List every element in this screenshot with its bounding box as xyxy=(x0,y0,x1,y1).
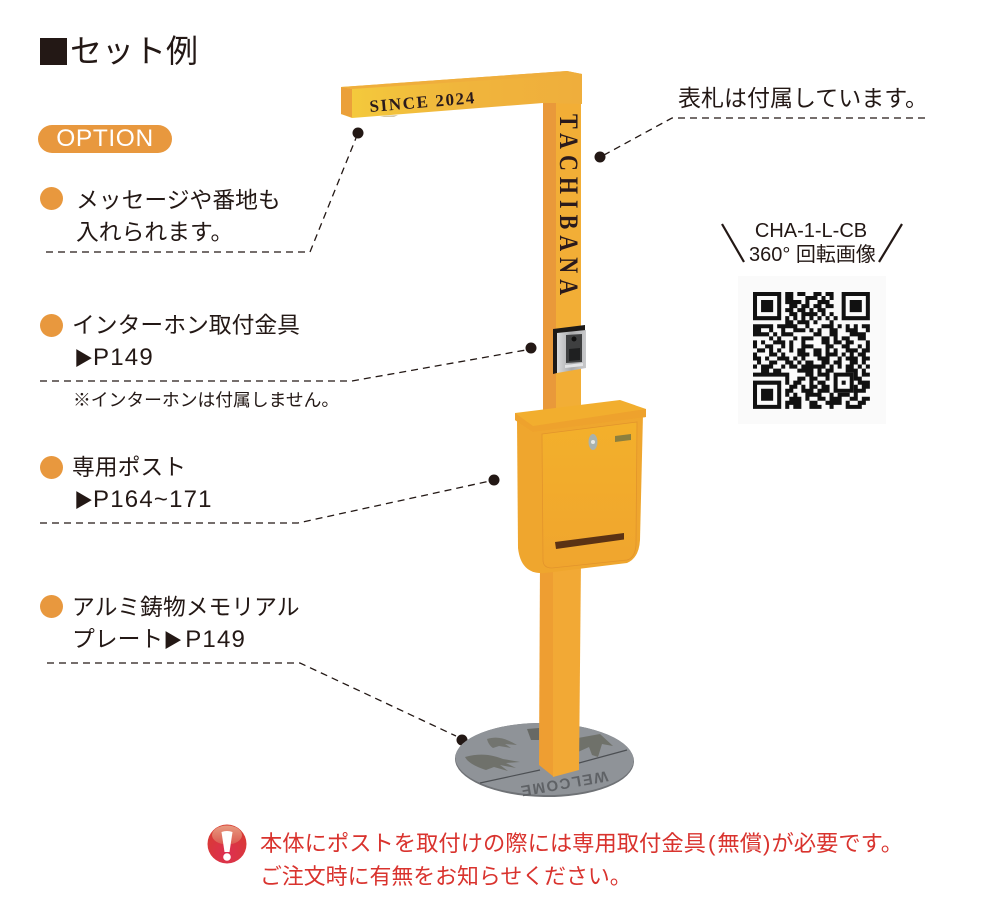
title text: セット例 xyxy=(70,33,198,69)
bullet xyxy=(40,456,63,479)
bullet xyxy=(40,595,63,618)
name plate xyxy=(615,434,631,442)
text: メッセージや番地も xyxy=(76,187,281,213)
warning text xyxy=(260,831,903,889)
bullet xyxy=(40,314,63,337)
base plate: WELCOME xyxy=(520,767,609,799)
sign text: SINCE 2024 xyxy=(369,88,475,116)
text xyxy=(72,454,213,513)
title square xyxy=(40,38,67,65)
text: インターホン取付金具 xyxy=(72,312,300,338)
text: ▶P164~171 xyxy=(74,486,213,513)
base plate xyxy=(454,721,635,799)
nameplate note: 表札は付属しています。 xyxy=(678,85,928,111)
option: memorial plate xyxy=(40,594,300,653)
option: message xyxy=(40,187,281,244)
warning text: ご注文時に有無をお知らせください。 xyxy=(260,864,632,889)
QR code background noise xyxy=(738,276,886,424)
QR caption: CHA-1-L-CB xyxy=(755,220,867,242)
lower pole xyxy=(539,560,581,777)
text: 専用ポスト xyxy=(72,454,186,480)
text: アルミ鋳物メモリアル xyxy=(72,594,300,620)
QR code xyxy=(753,292,870,409)
QR caption line 2: 360° 回転画像 xyxy=(749,244,876,266)
text xyxy=(76,187,281,244)
text: プレート▶P149 xyxy=(72,626,246,653)
option badge: OPTION xyxy=(56,125,154,152)
QR bracket lines xyxy=(722,224,902,262)
intercom note: ※インターホンは付属しません。 xyxy=(73,390,339,410)
text: 入れられます。 xyxy=(76,218,233,244)
mail box xyxy=(515,400,646,573)
title xyxy=(40,33,198,69)
bullet xyxy=(40,187,63,210)
text xyxy=(72,312,300,371)
upper column and arm xyxy=(341,71,583,410)
text: ▶P149 xyxy=(74,344,154,371)
warning text: 本体にポストを取付けの際には専用取付金具(無償)が必要です。 xyxy=(260,831,903,856)
lock xyxy=(588,434,598,450)
option: mail box xyxy=(40,454,213,513)
upper column and arm: TACHIBANA xyxy=(553,114,583,295)
letter slot xyxy=(555,533,624,549)
warning icon xyxy=(208,824,246,864)
option: intercom bracket xyxy=(40,312,300,371)
intercom xyxy=(553,325,586,374)
text xyxy=(72,594,300,653)
